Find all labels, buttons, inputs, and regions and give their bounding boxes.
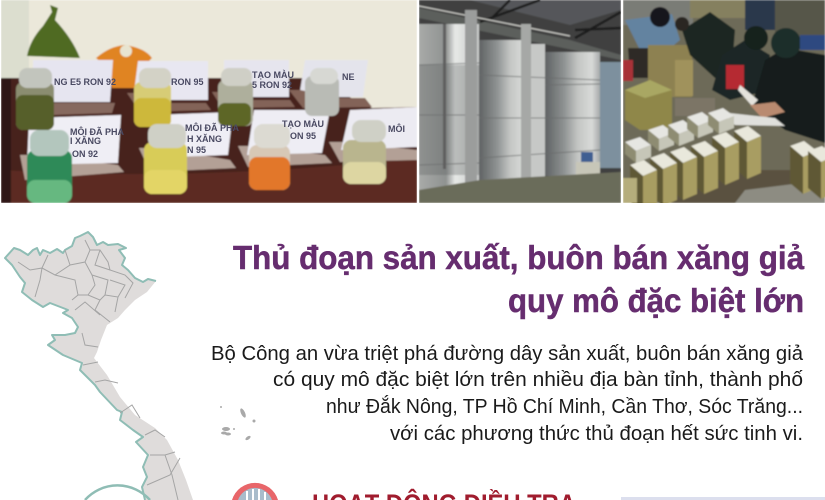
jar card labels: NG E5 RON 92: [54, 77, 116, 87]
jar card labels: 5 RON 92: [252, 80, 292, 90]
map of Vietnam: [5, 232, 193, 500]
photo: fuel sample jars on a table: [1, 0, 417, 203]
panel: section box edge: [621, 497, 825, 500]
icon: investigation badge: [232, 483, 278, 500]
map: province borders: [18, 240, 180, 500]
jar card labels: NE: [342, 72, 355, 82]
jar card labels: I XĂNG: [70, 136, 101, 146]
jar card labels: N 95: [187, 145, 206, 155]
jar card labels: [54, 70, 405, 159]
intro text block: có quy mô đặc biệt lớn trên nhiều địa bàn tỉnh, thành phố: [273, 368, 803, 391]
jar card labels: MÔI ĐÃ PHA: [185, 122, 240, 133]
jar card labels: TẠO MÀU: [282, 119, 324, 129]
intro text block: Bộ Công an vừa triệt phá đường dây sản xuất, buôn bán xăng giả: [211, 342, 804, 365]
jar card labels: ON 95: [290, 131, 316, 141]
map callout circle: [85, 485, 150, 500]
intro text block: với các phương thức thủ đoạn hết sức tinh vi.: [390, 422, 803, 445]
photo: officers inspecting fuel cans: [623, 0, 825, 213]
jar card labels: H XĂNG: [187, 134, 222, 144]
intro text block: [211, 342, 804, 445]
jar card labels: MÔI: [388, 123, 405, 134]
photo: steel fuel storage tanks: [419, 0, 621, 203]
title: [233, 239, 805, 319]
map: land area: [5, 232, 193, 500]
intro text block: như Đắk Nông, TP Hồ Chí Minh, Cần Thơ, Sóc Trăng...: [326, 395, 803, 418]
icon: offshore islands: [220, 406, 256, 441]
map: land border: [5, 232, 156, 500]
jar card labels: MÔI ĐÃ PHA: [70, 126, 125, 137]
title: quy mô đặc biệt lớn: [508, 282, 804, 319]
jar card labels: RON 95: [171, 77, 204, 87]
jar card labels: ON 92: [72, 149, 98, 159]
title: Thủ đoạn sản xuất, buôn bán xăng giả: [233, 239, 805, 276]
jar card labels: TẠO MÀU: [252, 70, 294, 80]
